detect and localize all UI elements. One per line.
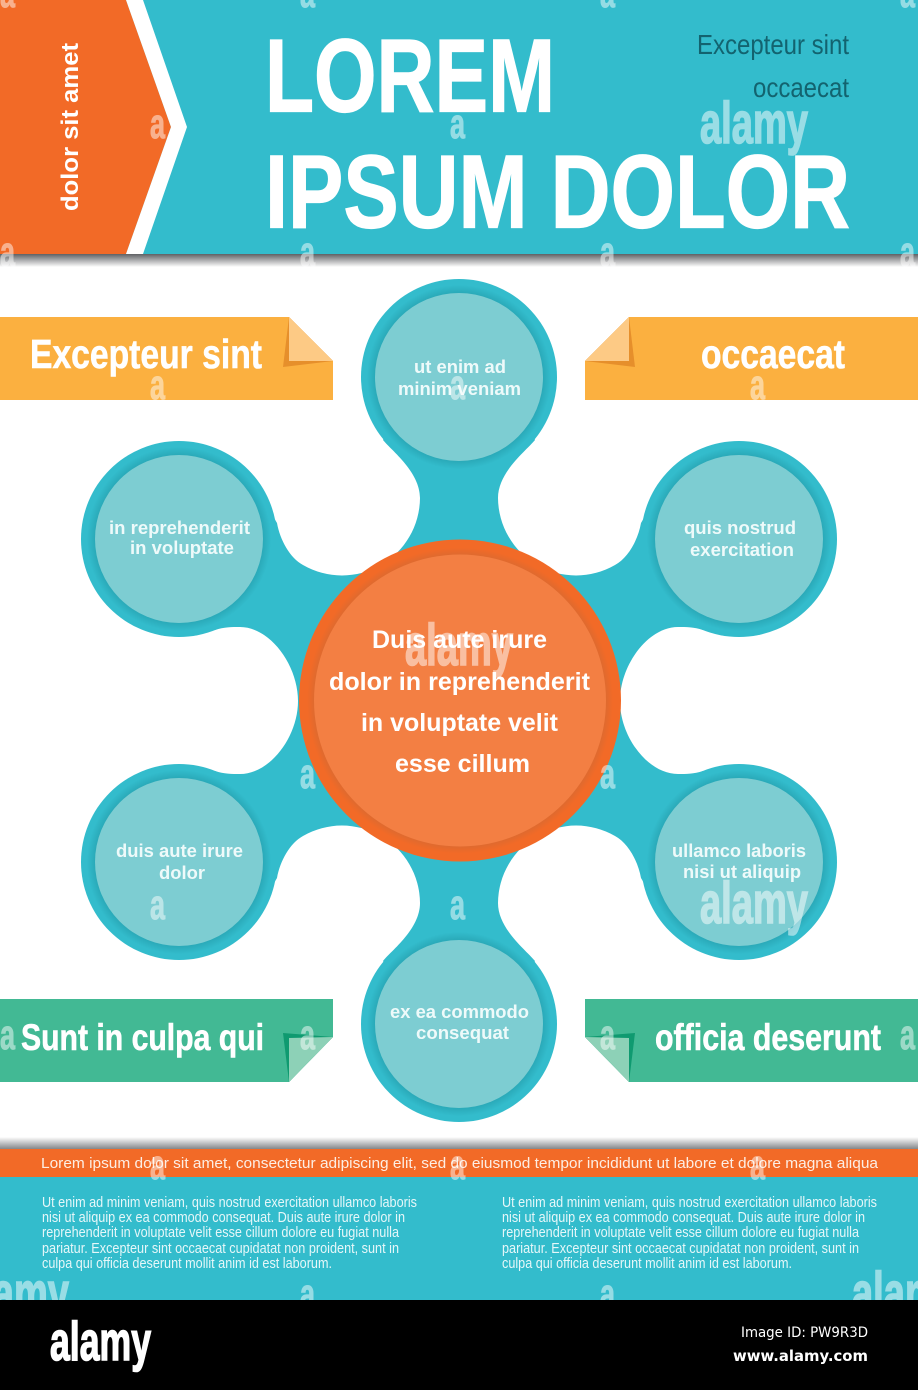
left paragraph <box>42 1194 417 1272</box>
concave cut-out right <box>620 627 748 774</box>
centre node: dolor in reprehenderit <box>329 668 591 696</box>
centre node <box>299 540 621 862</box>
title line one: LOREM <box>265 18 555 134</box>
watermark pattern: alamy <box>700 871 808 936</box>
right paragraph: culpa qui officia deserunt mollit anim id est laborum. <box>502 1255 792 1272</box>
ribbon: orange left <box>0 317 333 400</box>
watermark pattern: a <box>450 361 465 408</box>
header side text: Excepteur sint <box>697 29 849 60</box>
node: lower right <box>641 764 837 960</box>
header teal panel <box>0 0 918 254</box>
orange arrow tab <box>0 0 171 254</box>
watermark pattern: a <box>300 1011 315 1058</box>
watermark pattern: a <box>600 750 615 797</box>
watermark pattern: a <box>150 1141 165 1188</box>
orange strip text: Lorem ipsum dolor sit amet, consectetur adipiscing elit, sed do eiusmod tempor incididunt ut labore et dolore magna aliqua <box>41 1155 879 1172</box>
teal panel <box>0 1177 918 1300</box>
watermark pattern: alamy <box>405 613 513 678</box>
watermark pattern: a <box>300 1270 315 1317</box>
teal connector shape <box>179 377 739 1024</box>
centre node: Duis aute irure <box>372 626 547 654</box>
node: bottom: ex ea commodo <box>390 1002 529 1022</box>
watermark pattern: a <box>750 1141 765 1188</box>
ribbon: orange left: Excepteur sint <box>30 331 262 377</box>
footer shadow <box>0 1137 918 1149</box>
right paragraph: pariatur. Excepteur sint occaecat cupidatat non proident, sunt in <box>502 1240 859 1257</box>
left paragraph: Ut enim ad minim veniam, quis nostrud exercitation ullamco laboris <box>42 1194 417 1211</box>
header side text two: occaecat <box>753 72 849 103</box>
node: upper right: exercitation <box>690 540 794 560</box>
watermark pattern: a <box>300 228 315 275</box>
centre node: esse cillum <box>395 750 530 778</box>
node: upper right: quis nostrud <box>684 518 796 538</box>
node: lower right: ullamco laboris <box>672 841 806 861</box>
node: upper left <box>81 441 277 637</box>
header shadow <box>0 254 918 267</box>
watermark pattern: a <box>600 1011 615 1058</box>
watermark pattern: a <box>450 1141 465 1188</box>
alamy logo: alamy <box>50 1310 151 1372</box>
stock photo footer bar <box>0 1300 918 1390</box>
website: www.alamy.com <box>733 1347 868 1365</box>
white chevron <box>126 0 187 254</box>
ribbon: green left <box>0 999 333 1082</box>
concave cut-out left <box>170 627 298 774</box>
node: upper left: in reprehenderit <box>109 518 250 538</box>
concave cut-out upper left <box>240 405 420 575</box>
tab label: dolor sit amet <box>57 43 84 211</box>
watermark pattern: a <box>300 750 315 797</box>
watermark pattern: a <box>150 100 165 147</box>
node: upper left: in voluptate <box>130 538 234 558</box>
node: upper right <box>641 441 837 637</box>
watermark pattern: a <box>600 490 615 537</box>
node: lower right: nisi ut aliquip <box>683 862 801 882</box>
hub diagram <box>81 279 837 1122</box>
node: top: minim veniam <box>398 379 521 399</box>
watermark pattern: a <box>0 228 15 275</box>
left paragraph: pariatur. Excepteur sint occaecat cupidatat non proident, sunt in <box>42 1240 399 1257</box>
concave cut-out upper right <box>498 405 678 575</box>
right paragraph <box>502 1194 877 1272</box>
image id: Image ID: PW9R3D <box>741 1325 868 1341</box>
ribbon: green right <box>585 999 918 1082</box>
watermark pattern: a <box>0 1011 15 1058</box>
watermark pattern: alamy <box>700 91 808 156</box>
concave cut-out lower right <box>498 826 678 996</box>
node: top <box>361 279 557 475</box>
watermark pattern: a <box>600 228 615 275</box>
watermark pattern: a <box>150 881 165 928</box>
watermark pattern: a <box>450 100 465 147</box>
header banner <box>0 0 918 267</box>
node: lower left: dolor <box>159 863 205 883</box>
left paragraph: nisi ut aliquip ex ea commodo consequat. Duis aute irure dolor in <box>42 1209 405 1226</box>
node: lower left <box>81 764 277 960</box>
ribbon: orange right <box>585 317 918 400</box>
node: lower left: duis aute irure <box>116 841 243 861</box>
ribbon: green left: Sunt in culpa qui <box>21 1017 264 1058</box>
left paragraph: reprehenderit in voluptate velit esse cillum dolore eu fugiat nulla <box>42 1224 400 1241</box>
concave cut-out lower left <box>240 826 420 996</box>
node: bottom: consequat <box>416 1023 509 1043</box>
right paragraph: reprehenderit in voluptate velit esse cillum dolore eu fugiat nulla <box>502 1224 860 1241</box>
footer panel <box>0 1137 918 1300</box>
watermark pattern: a <box>150 361 165 408</box>
watermark pattern: a <box>600 1270 615 1317</box>
watermark pattern: a <box>300 490 315 537</box>
node: bottom <box>361 926 557 1122</box>
left paragraph: culpa qui officia deserunt mollit anim id est laborum. <box>42 1255 332 1272</box>
watermark pattern: a <box>450 881 465 928</box>
centre node: in voluptate velit <box>361 709 559 737</box>
orange strip <box>0 1149 918 1177</box>
node: top: ut enim ad <box>414 357 506 377</box>
ribbon: orange right: occaecat <box>701 331 845 377</box>
watermark pattern: a <box>750 361 765 408</box>
